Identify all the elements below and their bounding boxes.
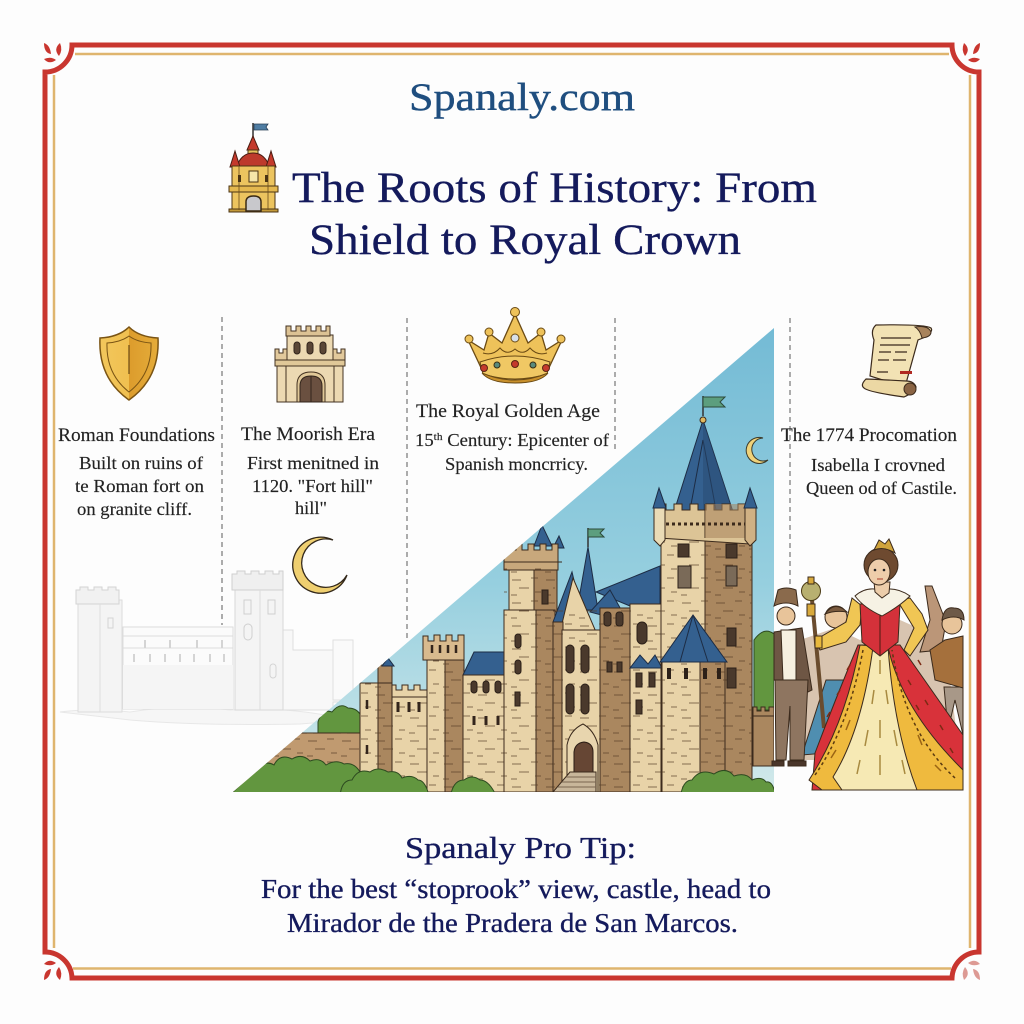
panel: Roman Foundations: Roman Foundations — [58, 425, 215, 446]
panel: The Royal Golden Age: Century: Epicenter of — [443, 430, 609, 450]
panel: The Royal Golden Age: 15 — [415, 430, 433, 450]
panel: The 1774 Proclamation — [781, 425, 958, 498]
callout: pro tip: For the best “stoprook” view, castle, head to — [261, 874, 771, 904]
title: Shield to Royal Crown — [309, 217, 741, 264]
panel: The Moorish Era: First menitned in — [247, 453, 379, 473]
icon: keep — [275, 326, 345, 402]
panel: The Royal Golden Age: th — [434, 431, 443, 443]
illustration: castle in sky triangle — [233, 328, 776, 800]
panel: The Royal Golden Age: The Royal Golden Age — [416, 401, 600, 422]
panel: The Moorish Era: hill" — [295, 498, 327, 518]
icon: crescent moon — [293, 537, 347, 593]
panel: The 1774 Proclamation: Queen od of Castile. — [806, 478, 957, 498]
title — [292, 165, 817, 264]
queen head and crown — [864, 539, 898, 585]
callout: pro tip: Spanaly Pro Tip: — [405, 830, 636, 865]
main keep — [653, 396, 757, 792]
panel: The Moorish Era — [241, 424, 379, 518]
panel: Roman Foundations: on granite cliff. — [77, 499, 192, 519]
icon: shield — [100, 327, 158, 400]
title: The Roots of History: From — [292, 165, 817, 212]
panel: Roman Foundations: te Roman fort on — [75, 476, 204, 496]
wing — [463, 652, 504, 792]
left walls — [233, 685, 427, 792]
round tower — [360, 658, 395, 772]
panel: Roman Foundations: Built on ruins of — [79, 453, 203, 473]
callout: pro tip: Mirador de the Pradera de San Marcos. — [287, 908, 738, 938]
panel: The Royal Golden Age — [415, 401, 609, 474]
left main tower — [504, 525, 564, 792]
icon: small crescent moon — [746, 437, 768, 463]
conic tower — [660, 615, 727, 792]
illustration: ghost castle sketch — [60, 571, 353, 724]
background trees — [318, 631, 774, 735]
bodice and sleeves — [815, 582, 928, 656]
wall behind right — [630, 604, 662, 792]
foreground shrubs — [233, 756, 774, 792]
central gothic facade — [553, 528, 630, 792]
far right wall — [753, 707, 774, 766]
icon: royal crown — [465, 308, 565, 383]
illustration: queen with crowd — [772, 539, 964, 790]
panel: The Moorish Era: 1120. "Fort hill" — [252, 476, 373, 496]
brand heading: Spanaly.com — [409, 76, 635, 119]
man on left — [772, 588, 812, 766]
icon: proclamation scroll — [862, 325, 932, 397]
callout: pro tip — [261, 830, 771, 938]
small tower — [423, 635, 464, 792]
crowd behind — [800, 586, 960, 760]
panel: The Royal Golden Age: Spanish moncrricy. — [445, 454, 588, 474]
panel: Roman Foundations — [58, 425, 215, 519]
icon: title castle — [229, 123, 278, 212]
man on right — [930, 608, 964, 735]
timeline dividers — [222, 317, 790, 640]
panel: The 1774 Proclamation: The 1774 Procomation — [781, 425, 958, 446]
scepter — [802, 577, 824, 728]
panel: The 1774 Proclamation: Isabella I crovned — [811, 455, 945, 475]
blue roof — [596, 566, 660, 606]
panel: The Moorish Era: The Moorish Era — [241, 424, 376, 445]
gown — [809, 645, 963, 790]
